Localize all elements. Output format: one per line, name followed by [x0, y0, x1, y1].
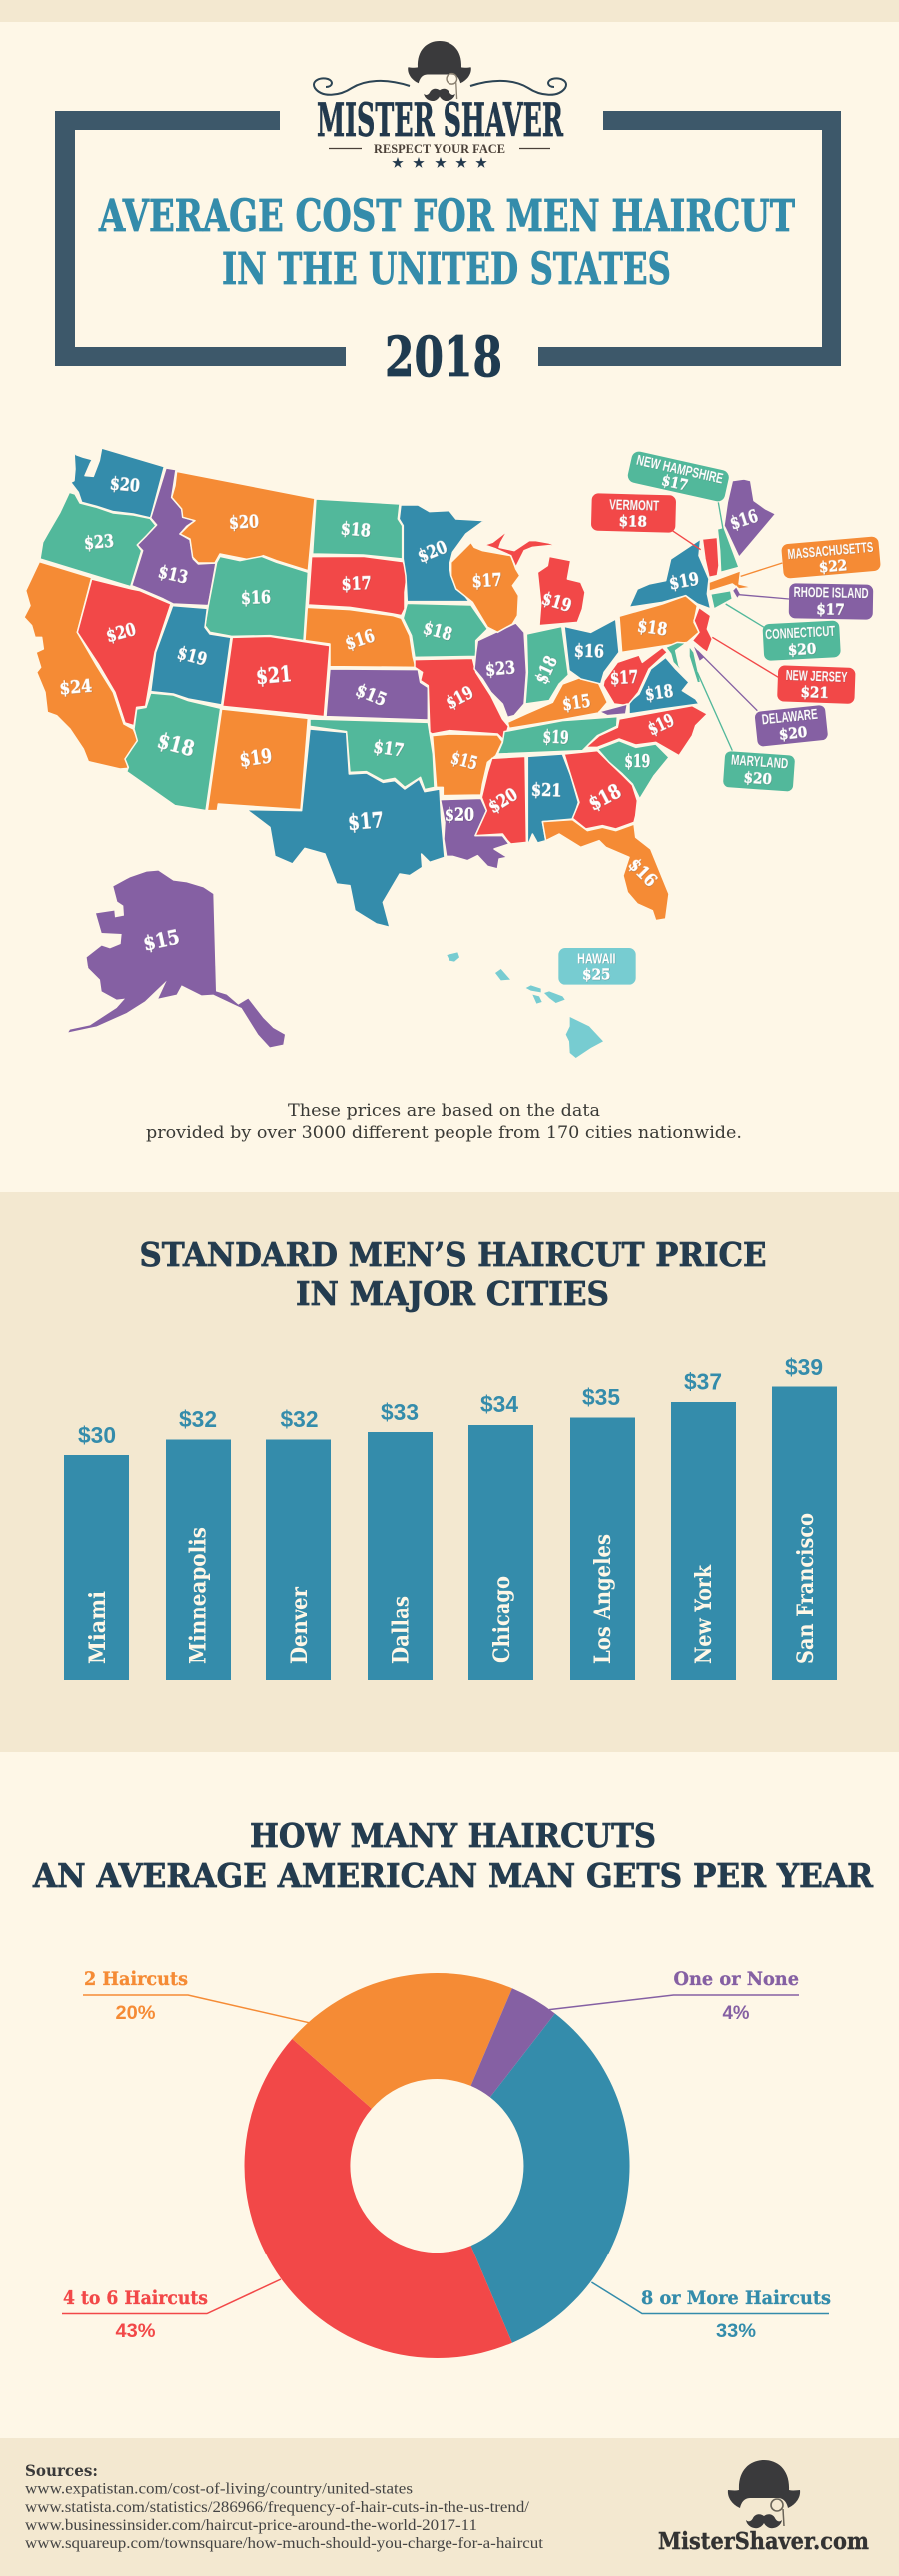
state: West Virginia — [603, 647, 667, 706]
state: New Hampshire — [717, 527, 739, 572]
donut label: 2 haircuts: 20% — [116, 2003, 156, 2024]
icon: footer hat logo — [728, 2460, 800, 2528]
state: Virginia — [629, 657, 699, 714]
state: Nebraska: $16 — [343, 625, 378, 654]
bar: Minneapolis: Minneapolis — [186, 1527, 212, 1664]
bar: New York: New York — [691, 1564, 717, 1664]
state: Wisconsin: $17 — [471, 570, 502, 592]
state: Idaho: $13 — [156, 561, 190, 588]
callout: Vermont: $18 — [618, 512, 647, 531]
bar chart — [64, 1354, 837, 1680]
state: New Jersey — [692, 607, 712, 652]
state: Arizona — [125, 693, 221, 811]
bar: San Francisco: $39 — [785, 1354, 823, 1380]
callout: Vermont — [591, 493, 676, 533]
state: Illinois: $23 — [484, 657, 516, 681]
state: Tennessee: $19 — [542, 726, 569, 749]
state: Vermont — [702, 537, 719, 577]
state: Oregon — [40, 492, 156, 587]
state: Maryland — [666, 642, 686, 674]
bar: Dallas: $33 — [381, 1399, 419, 1425]
state: Colorado — [223, 636, 330, 717]
callout: Hawaii: $25 — [582, 966, 610, 983]
bar: Los Angeles — [570, 1384, 635, 1680]
icon: left flourish — [314, 78, 410, 95]
callout: Rhode Island — [789, 583, 873, 620]
state: Arkansas — [433, 734, 502, 796]
donut label: 4 to 6 haircuts: 4 to 6 Haircuts — [63, 2287, 208, 2309]
state: Nevada — [77, 579, 171, 726]
callout: New Hampshire — [626, 450, 730, 503]
state: Alaska — [68, 871, 285, 1047]
donut label: one or none: One or None — [673, 1968, 799, 1990]
segment: 4 to 6 haircuts — [245, 2039, 512, 2358]
state: Utah — [151, 606, 231, 705]
state: Nebraska — [305, 607, 416, 667]
bar: Chicago — [468, 1391, 533, 1680]
callout: Maryland: $20 — [743, 769, 773, 789]
state: Ohio — [564, 619, 619, 684]
map note: These prices are based on the data — [288, 1101, 600, 1120]
state: North Carolina: $19 — [644, 710, 678, 740]
footer site name: MisterShaver.com — [658, 2528, 869, 2555]
state: Montana: $20 — [229, 511, 260, 534]
state: Pennsylvania: $18 — [636, 616, 669, 641]
state: Florida: $16 — [624, 854, 661, 892]
bar: San Francisco — [772, 1354, 837, 1680]
callout: Rhode Island: $17 — [816, 600, 845, 619]
sources list — [25, 2481, 544, 2552]
logo tagline: RESPECT YOUR FACE — [374, 141, 505, 156]
sources list: www.statista.com/statistics/286966/frequency-of-hair-cuts-in-the-us-trend/ — [25, 2499, 530, 2516]
state: Minnesota — [399, 505, 484, 602]
state: California — [24, 562, 138, 769]
callout: Maryland — [723, 751, 795, 792]
panel: footer — [0, 2438, 899, 2576]
year: 2018 — [385, 324, 502, 389]
map of the western and central states — [24, 448, 508, 927]
state: Wyoming — [205, 556, 308, 641]
callout: Vermont: VERMONT — [609, 497, 660, 515]
callout: Connecticut: $20 — [787, 640, 817, 659]
callout: Delaware: $20 — [778, 723, 808, 744]
state: Kentucky: $15 — [561, 691, 592, 716]
heading: haircuts per year: HOW MANY HAIRCUTS — [250, 1816, 656, 1855]
state: Alabama — [527, 754, 578, 843]
donut label: 4 to 6 haircuts — [62, 2279, 281, 2342]
state: North Dakota: $18 — [340, 518, 372, 542]
state: Kentucky — [507, 677, 607, 728]
bar: Denver: Denver — [287, 1587, 313, 1664]
donut label: one or none — [549, 1968, 799, 2024]
callout: Massachusetts — [781, 536, 881, 580]
bar: Dallas — [368, 1399, 433, 1680]
callout: Delaware — [754, 705, 828, 747]
state: Mississippi — [475, 756, 526, 844]
state: Wyoming: $16 — [241, 587, 271, 609]
state: Iowa — [403, 603, 487, 657]
map of the eastern states — [441, 450, 881, 921]
donut label: 2 haircuts — [83, 1968, 309, 2024]
state: Idaho — [132, 468, 216, 606]
state: Missouri: $19 — [443, 682, 477, 714]
state: Colorado: $21 — [255, 662, 293, 690]
state: West Virginia: $17 — [609, 667, 639, 689]
state: California: $24 — [59, 676, 93, 699]
state: Kansas: $15 — [353, 680, 390, 711]
icon: right flourish — [470, 78, 566, 95]
state: Texas: $17 — [347, 808, 385, 836]
state: Alaska: $15 — [141, 924, 182, 956]
bar: Denver — [266, 1406, 331, 1680]
bar: Los Angeles: $35 — [582, 1384, 620, 1410]
bar: San Francisco: San Francisco — [793, 1513, 819, 1664]
sources heading: Sources: — [25, 2461, 98, 2480]
bar: Miami — [64, 1422, 129, 1680]
state: Maine: $16 — [727, 505, 761, 534]
callout: New Jersey: $21 — [800, 683, 829, 702]
callout: New Hampshire: NEW HAMPSHIRE — [635, 453, 725, 488]
state: Kansas — [326, 669, 428, 720]
donut label: 8 or more haircuts: 8 or More Haircuts — [641, 2287, 831, 2309]
state: Oklahoma — [310, 719, 435, 790]
callout: Massachusetts: $22 — [818, 556, 848, 577]
state: South Dakota — [308, 556, 407, 616]
state: Oklahoma: $17 — [372, 737, 406, 762]
bar: Chicago: $34 — [480, 1391, 518, 1417]
callout: Hawaii — [558, 948, 636, 985]
bar: Dallas: Dallas — [389, 1596, 415, 1664]
state: New Mexico: $19 — [238, 745, 274, 772]
title: IN THE UNITED STATES — [222, 244, 671, 295]
state: Missouri — [415, 658, 508, 741]
donut label: one or none: 4% — [723, 2003, 750, 2024]
state: Washington: $20 — [109, 473, 141, 497]
sources list: www.squareup.com/townsquare/how-much-should-you-charge-for-a-haircut — [25, 2535, 544, 2552]
state: Georgia: $18 — [585, 779, 625, 815]
state: Iowa: $18 — [421, 618, 454, 645]
state: Maine — [724, 479, 776, 557]
bar: New York: $37 — [684, 1368, 722, 1394]
bar: Miami: Miami — [85, 1591, 111, 1664]
state: New York — [629, 539, 711, 609]
state: Michigan: $19 — [539, 588, 574, 617]
heading: haircuts per year — [32, 1816, 874, 1895]
donut label: 4 to 6 haircuts: 43% — [116, 2321, 156, 2342]
bar: New York — [671, 1368, 736, 1680]
state: Montana — [172, 471, 315, 571]
state: Oregon: $23 — [83, 531, 115, 554]
state: Arizona: $18 — [155, 729, 197, 762]
state: Rhode Island — [732, 586, 741, 599]
tagline rules — [329, 148, 550, 150]
state: South Carolina: $19 — [624, 751, 650, 772]
callout: Maryland: MARYLAND — [730, 753, 789, 773]
state: Florida — [542, 820, 669, 921]
callout: Connecticut — [762, 620, 841, 661]
state: Minnesota: $20 — [415, 537, 450, 567]
callout: Connecticut: CONNECTICUT — [765, 624, 836, 644]
state: New Mexico — [207, 709, 308, 811]
state: South Carolina — [597, 741, 669, 799]
callout: Delaware: DELAWARE — [761, 707, 819, 729]
southwest Virginia strip — [599, 704, 627, 716]
segment: one or none — [471, 1988, 555, 2097]
state: Ohio: $16 — [574, 640, 604, 663]
state: Georgia — [564, 751, 637, 829]
state: Michigan — [484, 531, 585, 626]
donut chart — [245, 1973, 630, 2358]
state: Indiana — [525, 626, 568, 704]
state: Texas — [247, 729, 445, 927]
state: Hawaii — [447, 948, 636, 1058]
state: Tennessee — [497, 717, 617, 754]
state: Virginia: $18 — [644, 681, 675, 706]
state: Alabama: $21 — [531, 779, 562, 802]
donut label: 8 or more haircuts: 33% — [716, 2321, 756, 2342]
donut label: 8 or more haircuts — [591, 2282, 831, 2342]
callout: New Hampshire: $17 — [660, 471, 690, 494]
state: North Dakota — [313, 499, 403, 559]
state: Massachusetts — [709, 571, 752, 591]
state: Utah: $19 — [175, 642, 209, 670]
state: Nevada: $20 — [104, 619, 138, 647]
icon: Delaware arrowhead — [694, 647, 704, 661]
callout leader lines — [672, 502, 789, 751]
state: Arkansas: $15 — [449, 748, 479, 775]
callout: Hawaii: HAWAII — [577, 951, 616, 966]
state: Maryland eastern shore — [689, 646, 701, 683]
bar: Denver: $32 — [280, 1406, 318, 1432]
state: New York: $19 — [668, 569, 701, 594]
sources list: www.businessinsider.com/haircut-price-around-the-world-2017-11 — [25, 2517, 477, 2534]
logo: Mister Shaver — [314, 41, 566, 168]
bar: Los Angeles: Los Angeles — [590, 1534, 616, 1664]
state: Louisiana: $20 — [445, 804, 474, 825]
icon: five stars — [392, 157, 487, 168]
sources list: www.expatistan.com/cost-of-living/country/united-states — [25, 2481, 413, 2498]
heading: haircuts per year: AN AVERAGE AMERICAN MAN GETS PER YEAR — [32, 1856, 874, 1895]
logo wordmark: MISTER SHAVER — [317, 93, 563, 147]
map note — [146, 1101, 742, 1142]
heading: major cities: IN MAJOR CITIES — [296, 1274, 609, 1313]
bar: Miami: $30 — [78, 1422, 116, 1448]
panel: major cities — [0, 1192, 899, 1752]
callout: New Jersey: NEW JERSEY — [786, 668, 848, 686]
heading: major cities — [140, 1235, 767, 1313]
bar: Chicago: Chicago — [489, 1576, 515, 1663]
title — [98, 191, 795, 295]
state: South Dakota: $17 — [341, 573, 372, 595]
segment: 8 or more haircuts — [471, 2013, 630, 2343]
icon: bowler hat with monocle and moustache — [408, 41, 471, 101]
title frame — [55, 111, 841, 366]
state: Connecticut — [711, 591, 732, 609]
state: Pennsylvania — [619, 596, 699, 652]
state: North Carolina — [586, 706, 707, 756]
state: Louisiana — [441, 798, 509, 869]
callout: New Jersey — [777, 665, 856, 704]
state: Indiana: $18 — [531, 653, 562, 687]
state: Washington — [71, 448, 164, 518]
bar: Minneapolis: $32 — [179, 1406, 217, 1432]
bar: Minneapolis — [166, 1406, 231, 1680]
state: Mississippi: $20 — [484, 784, 521, 818]
heading: major cities: STANDARD MEN’S HAIRCUT PRICE — [140, 1235, 767, 1274]
state: Wisconsin — [451, 542, 520, 632]
state: Illinois — [474, 623, 526, 717]
segment: 2 haircuts — [292, 1973, 512, 2109]
donut label: 2 haircuts: 2 Haircuts — [84, 1968, 188, 1990]
map note: provided by over 3000 different people from 170 cities nationwide. — [146, 1123, 742, 1142]
